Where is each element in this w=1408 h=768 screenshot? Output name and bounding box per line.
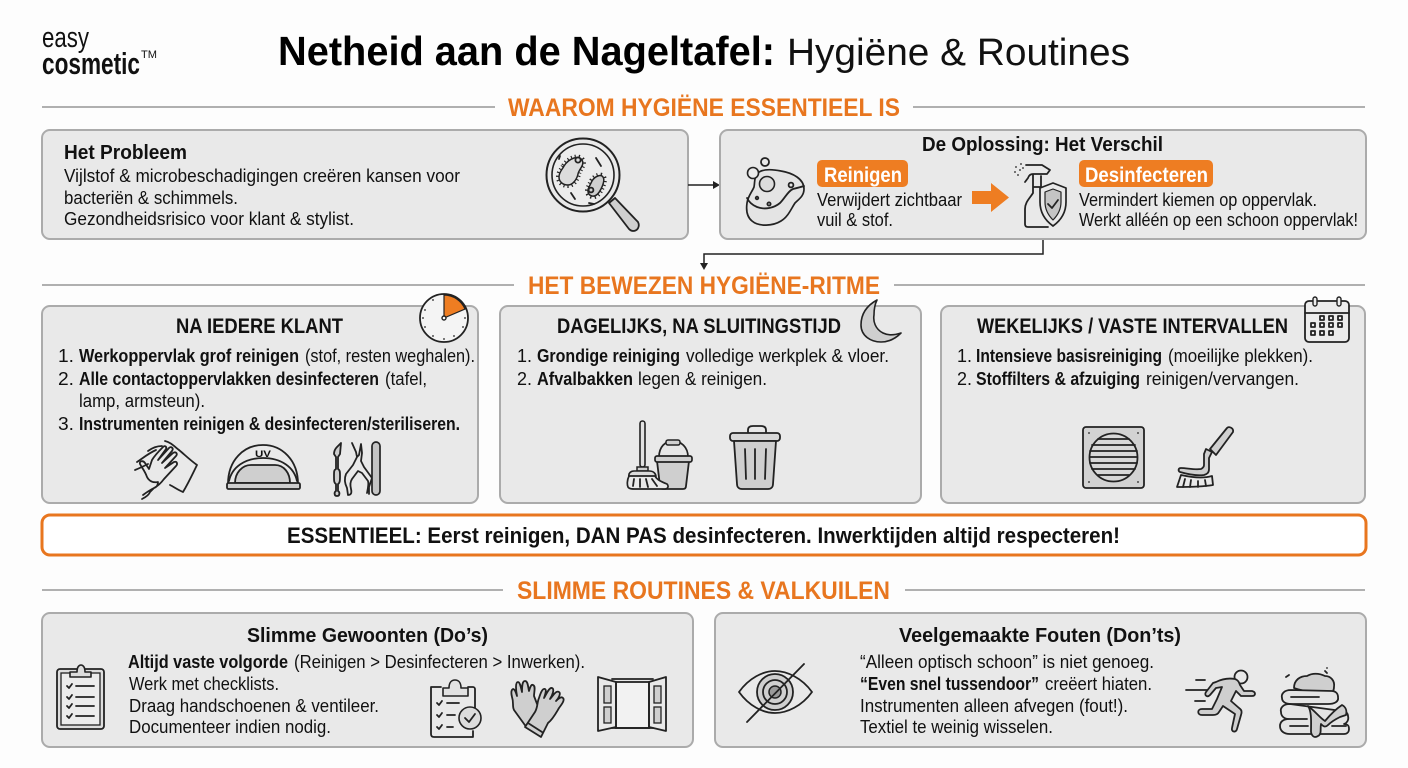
heading: slimme gewoonten: Slimme Gewoonten (Do’s): [247, 625, 488, 647]
callout: essentieel: ESSENTIEEL: Eerst reinigen, DAN PAS desinfecteren. Inwerktijden altijd respecteren!: [287, 523, 1120, 548]
text: do's list: Draag handschoenen & ventileer.: [129, 696, 379, 716]
icon: moon: [861, 300, 901, 342]
list: klant steps: lamp, armsteun).: [79, 391, 205, 411]
text: do's list: (Reinigen > Desinfecteren > Inwerken).: [294, 652, 585, 672]
list: dagelijks steps: legen & reinigen.: [638, 369, 767, 389]
arrow: oplossing to ritme: [700, 240, 1043, 270]
icon: calendar: [1305, 297, 1349, 342]
heading: na iedere klant: NA IEDERE KLANT: [176, 315, 343, 338]
text: do's list: Documenteer indien nodig.: [129, 717, 331, 737]
heading: wekelijks: WEKELIJKS / VASTE INTERVALLEN: [977, 315, 1288, 338]
title: Hygiëne & Routines: [787, 32, 1130, 74]
logo: TM: [141, 49, 157, 61]
text: reinigen description: vuil & stof.: [817, 210, 893, 230]
list: dagelijks steps: [517, 346, 889, 389]
text: probleem body: Vijlstof & microbeschadigingen creëren kansen voor: [64, 166, 460, 186]
text: probleem body: [64, 166, 460, 229]
list: klant steps: (stof, resten weghalen).: [305, 346, 475, 366]
list: klant steps: Alle contactoppervlakken desinfecteren: [79, 369, 379, 389]
logo: easy: [42, 22, 89, 54]
panel: na iedere klant: [42, 294, 478, 503]
list: wekelijks steps: (moeilijke plekken).: [1168, 346, 1313, 366]
list: klant steps: 2.: [58, 369, 74, 389]
icon: dirty textile stack: [1280, 668, 1349, 737]
text: do's list: Altijd vaste volgorde: [128, 652, 288, 672]
logo: cosmetic: [42, 46, 140, 81]
list: wekelijks steps: 2.: [957, 369, 972, 389]
heading: waarom hygiene essentieel is: WAAROM HYGIËNE ESSENTIEEL IS: [508, 94, 900, 122]
icon: scrub brush: [1177, 427, 1233, 487]
icon: sponge with bubbles: [747, 158, 804, 225]
icon: spray bottle with shield: [1015, 164, 1066, 227]
title: [278, 28, 1130, 74]
heading: het bewezen hygiene-ritme: HET BEWEZEN HYGIËNE-RITME: [528, 272, 880, 300]
list: wekelijks steps: Intensieve basisreiniging: [976, 346, 1162, 366]
icon: hand wiping: [135, 441, 197, 499]
badge: desinfecteren: Desinfecteren: [1085, 164, 1208, 187]
text: don'ts list: “Alleen optisch schoon” is niet genoeg.: [860, 652, 1154, 672]
text: reinigen description: Verwijdert zichtbaar: [817, 190, 962, 210]
list: wekelijks steps: reinigen/vervangen.: [1146, 369, 1299, 389]
icon: open window: [598, 677, 666, 731]
panel: dagelijks: [500, 300, 921, 503]
badge: reinigen: Reinigen: [824, 164, 902, 187]
list: klant steps: Werkoppervlak grof reinigen: [79, 346, 299, 366]
list: klant steps: 3.: [58, 414, 74, 434]
list: klant steps: (tafel,: [385, 369, 427, 389]
icon: clock: [420, 294, 468, 342]
title: Netheid aan de Nageltafel:: [278, 28, 775, 74]
text: desinfecteren description: Werkt alléén op een schoon oppervlak!: [1079, 210, 1358, 230]
heading: slimme routines en valkuilen: SLIMME ROUTINES & VALKUILEN: [517, 577, 890, 605]
text: do's list: Werk met checklists.: [129, 674, 279, 694]
text: probleem body: bacteriën & schimmels.: [64, 188, 238, 208]
text: desinfecteren description: Vermindert kiemen op oppervlak.: [1079, 190, 1317, 210]
list: dagelijks steps: 1.: [517, 346, 532, 366]
list: dagelijks steps: Grondige reiniging: [537, 346, 680, 366]
icon: trash can: [730, 426, 780, 489]
icon: checklist with tick: [431, 680, 481, 737]
text: probleem body: Gezondheidsrisico voor klant & stylist.: [64, 209, 354, 229]
list: wekelijks steps: 1.: [957, 346, 972, 366]
panel: don'ts: [715, 613, 1366, 747]
text: don'ts list: creëert hiaten.: [1045, 674, 1152, 694]
list: wekelijks steps: [957, 346, 1313, 389]
text: do's list: [128, 652, 585, 737]
text: don'ts list: [860, 652, 1154, 737]
arrow: orange: [972, 183, 1009, 212]
list: klant steps: [58, 346, 475, 434]
panel: do's: [42, 613, 693, 747]
heading: de oplossing: De Oplossing: Het Verschil: [922, 134, 1163, 156]
icon: crossed-out eye: [739, 664, 812, 722]
text: don'ts list: “Even snel tussendoor”: [860, 674, 1039, 694]
text: desinfecteren description: [1079, 190, 1358, 230]
list: klant steps: Instrumenten reinigen & desinfecteren/steriliseren.: [79, 414, 460, 434]
panel: wekelijks: [941, 297, 1365, 503]
icon: uv lamp: UV: [255, 449, 271, 459]
list: dagelijks steps: Afvalbakken: [537, 369, 633, 389]
icon: uv lamp: [227, 445, 300, 489]
text: reinigen description: [817, 190, 962, 230]
logo: [42, 22, 157, 81]
panel: de oplossing: [720, 130, 1366, 239]
list: dagelijks steps: volledige werkplek & vloer.: [686, 346, 889, 366]
icon: mop and bucket: [627, 421, 692, 489]
panel: het probleem: [42, 130, 688, 239]
icon: gloves: [511, 681, 564, 737]
list: wekelijks steps: Stoffilters & afzuiging: [976, 369, 1140, 389]
list: klant steps: 1.: [58, 346, 74, 366]
list: dagelijks steps: 2.: [517, 369, 532, 389]
icon: vent: [1083, 427, 1144, 488]
arrow: probleem to oplossing: [688, 181, 720, 189]
icon: nail tools: [334, 442, 380, 496]
heading: dagelijks: DAGELIJKS, NA SLUITINGSTIJD: [557, 315, 841, 338]
icon: running figure: [1186, 670, 1255, 732]
heading: het probleem: Het Probleem: [64, 142, 187, 164]
heading: veelgemaakte fouten: Veelgemaakte Fouten (Don’ts): [899, 625, 1181, 647]
text: don'ts list: Instrumenten alleen afvegen (fout!).: [860, 696, 1128, 716]
icon: clipboard: [57, 665, 104, 729]
callout: essentieel: [42, 515, 1366, 555]
icon: magnifier with bacteria: [546, 138, 639, 231]
text: don'ts list: Textiel te weinig wisselen.: [860, 717, 1053, 737]
